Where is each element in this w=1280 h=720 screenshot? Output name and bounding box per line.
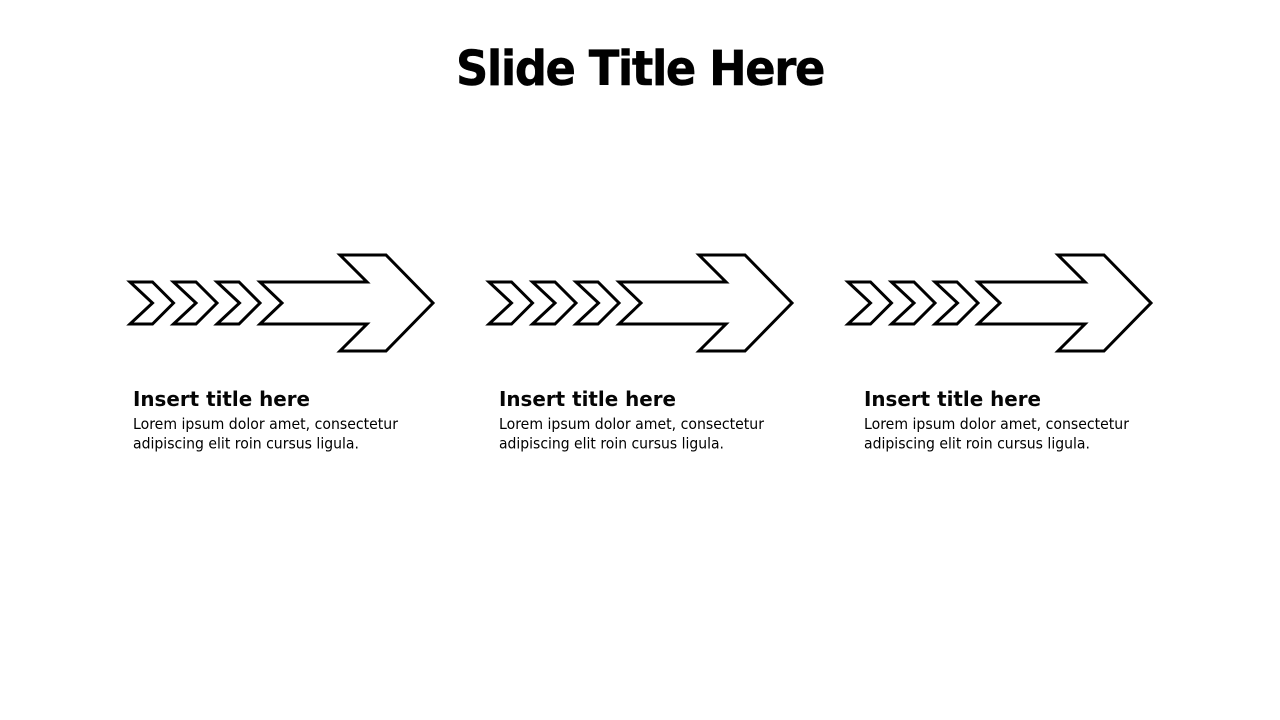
icon: chevron 3 — [576, 282, 619, 324]
body text 1 — [133, 415, 399, 452]
icon: chevron 1 — [130, 282, 174, 324]
arrow graphic 2 — [489, 255, 792, 351]
icon: large arrow — [978, 255, 1151, 351]
heading 2: Insert title here — [499, 387, 676, 411]
body text 3: adipiscing elit roin cursus ligula. — [864, 434, 1090, 452]
arrow graphic 3 — [848, 255, 1151, 351]
text block 3 — [864, 387, 1130, 452]
icon: chevron 1 — [848, 282, 892, 324]
text block 2 — [499, 387, 765, 452]
icon: large arrow — [260, 255, 433, 351]
icon: large arrow — [619, 255, 792, 351]
icon: chevron 2 — [892, 282, 935, 324]
body text 2 — [499, 415, 765, 452]
icon: chevron 1 — [489, 282, 532, 324]
body text 3 — [864, 415, 1130, 452]
icon: chevron 3 — [935, 282, 978, 324]
body text 1: Lorem ipsum dolor amet, consectetur — [133, 415, 399, 433]
body text 2: adipiscing elit roin cursus ligula. — [499, 434, 724, 452]
heading 1: Insert title here — [133, 387, 310, 411]
arrow graphic 1 — [130, 255, 433, 351]
body text 1: adipiscing elit roin cursus ligula. — [133, 434, 359, 452]
icon: chevron 2 — [532, 282, 576, 324]
body text 2: Lorem ipsum dolor amet, consectetur — [499, 415, 765, 433]
icon: chevron 3 — [217, 282, 260, 324]
heading 3: Insert title here — [864, 387, 1041, 411]
icon: chevron 2 — [174, 282, 217, 324]
title: Slide Title Here — [456, 41, 824, 97]
body text 3: Lorem ipsum dolor amet, consectetur — [864, 415, 1130, 433]
text block 1 — [133, 387, 399, 452]
